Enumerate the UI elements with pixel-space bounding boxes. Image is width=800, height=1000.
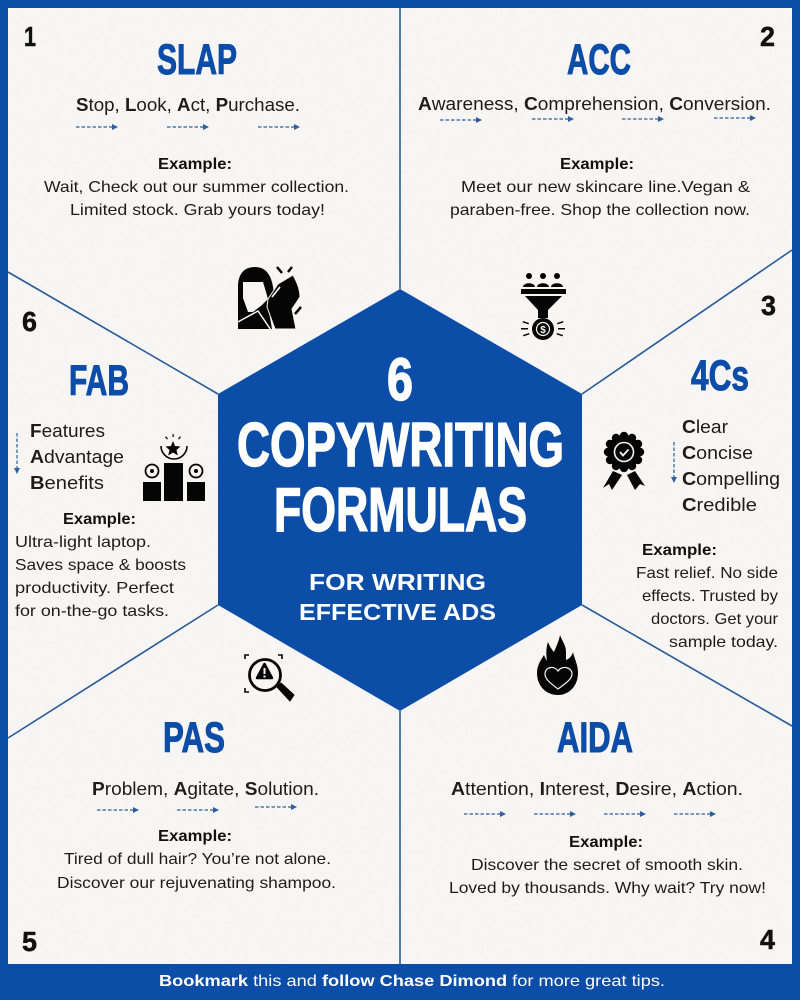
title line: copywriting: COPYWRITING (237, 411, 564, 480)
example text: productivity. Perfect (15, 580, 175, 597)
example text: Wait, Check out our summer collection. (44, 179, 349, 196)
example text (57, 851, 336, 892)
panel: AIDA (449, 635, 775, 955)
example text (636, 565, 779, 651)
heading SLAP: SLAP (157, 36, 237, 84)
heading FAB: FAB (69, 357, 129, 405)
title number: 6 (387, 346, 413, 413)
number 1: 1 (24, 21, 36, 52)
example text: for on-the-go tasks. (15, 603, 169, 620)
panel: SLAP (24, 21, 349, 330)
example label: Example: (158, 828, 232, 845)
formula line: Problem, Agitate, Solution. (92, 779, 319, 799)
panel: PAS (22, 655, 336, 957)
formula line: Stop, Look, Act, Purchase. (76, 95, 300, 115)
icon: woman facepalm (236, 267, 301, 330)
footer bar (0, 964, 800, 1000)
heading ACC: ACC (567, 36, 631, 84)
example label: Example: (63, 511, 136, 528)
formula line: Attention, Interest, Desire, Action. (451, 779, 743, 799)
formula list (682, 417, 780, 515)
example text: Meet our new skincare line.Vegan & (461, 179, 750, 196)
icon: award rosette (603, 432, 645, 490)
number 2: 2 (760, 21, 775, 52)
heading PAS: PAS (163, 714, 225, 762)
title line: formulas: FORMULAS (274, 476, 527, 545)
formula list: Concise (682, 443, 753, 463)
formula line: Awareness, Comprehension, Conversion. (418, 94, 771, 114)
example label: Example: (642, 542, 717, 559)
number 3: 3 (761, 290, 776, 321)
example text: doctors. Get your (651, 611, 779, 628)
example text: Discover our rejuvenating shampoo. (57, 875, 336, 892)
icon: sales funnel (521, 273, 566, 340)
example label: Example: (158, 156, 232, 173)
panel: 4Cs (603, 290, 780, 651)
example text: Loved by thousands. Why wait? Try now! (449, 880, 766, 897)
number 5: 5 (22, 926, 37, 957)
formula list: Compelling (682, 469, 780, 489)
icon: flaming heart (537, 635, 578, 695)
icon: magnifier with warning (245, 655, 294, 701)
dashed arrow (14, 433, 20, 474)
formula list: Features (30, 421, 105, 441)
heading AIDA: AIDA (557, 714, 633, 762)
formula list: Benefits (30, 473, 104, 493)
example text: Fast relief. No side (636, 565, 778, 582)
number 6: 6 (22, 306, 37, 337)
subtitle line 2: EFFECTIVE ADS (299, 599, 496, 625)
example text (450, 179, 750, 219)
formula list: Clear (682, 417, 728, 437)
dashed arrows (76, 124, 300, 130)
dashed arrows (97, 804, 297, 813)
formula list: Advantage (30, 447, 124, 467)
example text: Ultra-light laptop. (15, 534, 151, 551)
heading 4Cs: 4Cs (691, 352, 749, 400)
panel: FAB (14, 306, 205, 620)
example text: Limited stock. Grab yours today! (70, 202, 325, 219)
example text: sample today. (669, 634, 778, 651)
dashed arrows (464, 811, 716, 817)
panel: ACC (418, 21, 775, 340)
example text (15, 534, 186, 620)
number 4: 4 (760, 924, 775, 955)
example text (449, 857, 766, 897)
icon: sales funnel: $ (540, 325, 546, 336)
example label: Example: (560, 156, 634, 173)
example text: paraben-free. Shop the collection now. (450, 202, 750, 219)
formula list (30, 421, 124, 493)
formula list: Credible (682, 495, 757, 515)
central hexagon with title (218, 289, 582, 711)
example text: Discover the secret of smooth skin. (471, 857, 743, 874)
example text: Tired of dull hair? You’re not alone. (64, 851, 331, 868)
dashed arrow (671, 442, 677, 483)
subtitle line 1: FOR WRITING (309, 569, 486, 595)
example text (44, 179, 349, 219)
dashed arrows (440, 115, 756, 123)
example text: Saves space & boosts (15, 557, 186, 574)
example text: effects. Trusted by (642, 588, 778, 605)
icon: podium with stars (143, 434, 205, 501)
footer bar: Bookmark this and follow Chase Dimond for more great tips. (159, 973, 665, 990)
example label: Example: (569, 834, 643, 851)
